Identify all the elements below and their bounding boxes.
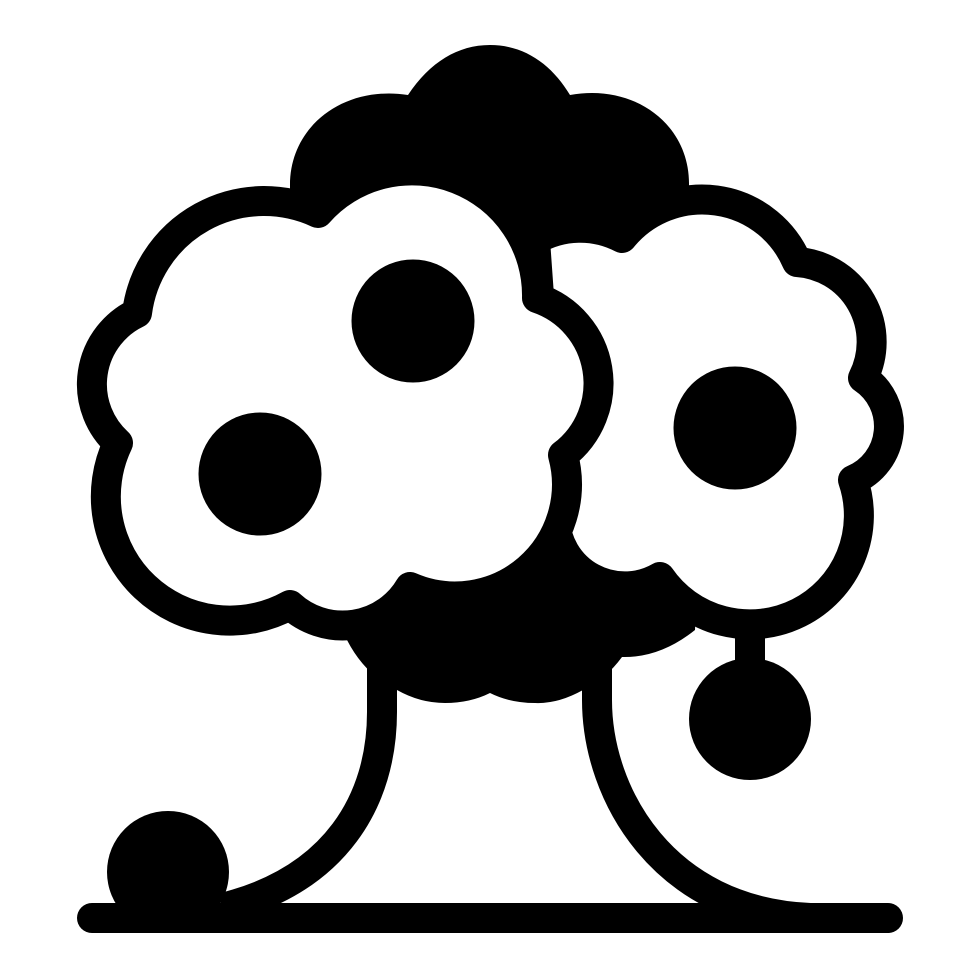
- trunk left edge: [222, 665, 382, 908]
- fallen fruit: [107, 811, 229, 933]
- fruit: right foliage: [674, 366, 796, 490]
- right foliage: [535, 200, 889, 624]
- back canopy: [290, 45, 689, 420]
- trunk right edge: [597, 665, 810, 918]
- left foliage: [92, 170, 599, 626]
- ground line: [92, 903, 888, 933]
- fruit: upper left foliage: [352, 260, 474, 382]
- hanging fruit: [689, 625, 811, 780]
- fruit: lower left foliage: [198, 412, 322, 536]
- tree trunk: [222, 665, 810, 918]
- lower canopy shadow: [347, 480, 700, 703]
